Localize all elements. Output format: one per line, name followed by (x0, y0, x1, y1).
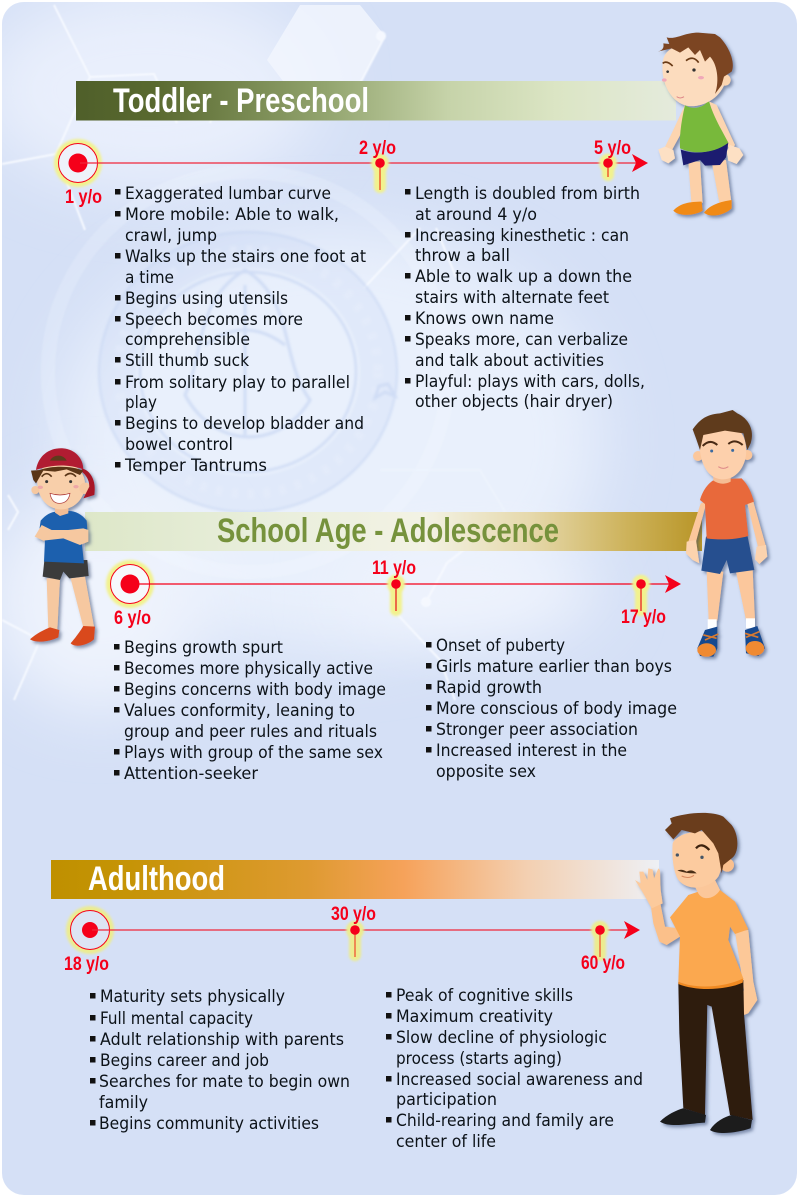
list: adulthood left column: Maturity sets physically (100, 987, 285, 1006)
timeline: adulthood: 18 y/o (64, 954, 109, 975)
list: toddler right column: at around 4 y/o (415, 205, 537, 224)
list: adulthood right column (386, 986, 643, 1151)
list: adulthood right column: Child-rearing and family are (396, 1111, 614, 1130)
timeline: toddler (54, 138, 648, 208)
character: boy with red cap (30, 448, 95, 646)
list: toddler left column: Temper Tantrums (124, 456, 267, 475)
list: adulthood left column: Adult relationship with parents (100, 1030, 344, 1049)
list: adulthood right column: process (starts aging) (396, 1049, 562, 1068)
list: school age right column: Girls mature earlier than boys (436, 657, 672, 676)
list: toddler right column: stairs with alternate feet (415, 288, 609, 307)
emblem watermark (99, 232, 397, 512)
list: toddler left column: Still thumb suck (125, 351, 249, 370)
list: toddler left column: Begins using utensils (125, 289, 288, 308)
list: adulthood left column: Begins career and job (100, 1051, 269, 1070)
list: toddler left column: play (125, 393, 157, 412)
list: school age right column: More conscious of body image (436, 699, 677, 718)
list: adulthood left column: Full mental capacity (100, 1009, 253, 1028)
list: adulthood right column: participation (396, 1090, 497, 1109)
character: toddler (658, 33, 743, 216)
list: toddler right column: Speaks more, can verbalize (415, 330, 628, 349)
list: toddler left column: From solitary play to parallel (125, 373, 350, 392)
list: school age right column (426, 636, 677, 781)
list: adulthood left column: family (99, 1093, 148, 1112)
list: toddler left column: More mobile: Able to walk, (125, 205, 339, 224)
list: school age left column: group and peer rules and rituals (124, 722, 377, 741)
list: toddler left column: Walks up the stairs one foot at (125, 247, 366, 266)
timeline: toddler: 5 y/o (594, 138, 631, 159)
list: adulthood right column: Peak of cognitive skills (396, 986, 573, 1005)
timeline: school age: 11 y/o (372, 558, 416, 579)
heading: School Age - Adolescence: School Age - Adolescence (217, 512, 559, 550)
list: toddler right column: other objects (hair dryer) (415, 392, 613, 411)
list: school age left column: Becomes more physically active (124, 659, 373, 678)
heading: Adulthood: Adulthood (88, 860, 225, 898)
list: school age left column: Attention-seeker (124, 764, 258, 783)
list: adulthood right column: Maximum creativity (396, 1007, 553, 1026)
list: toddler left column: a time (125, 268, 174, 287)
list: school age right column: Stronger peer association (436, 720, 638, 739)
list: toddler left column: crawl, jump (125, 226, 217, 245)
list: school age left column: Begins growth spurt (124, 638, 283, 657)
list: toddler left column: Begins to develop bladder and (125, 414, 364, 433)
list: toddler left column (115, 184, 366, 475)
list: toddler right column: Increasing kinesthetic : can (415, 226, 629, 245)
list: toddler right column: Able to walk up a down the (415, 267, 632, 286)
heading: Toddler - Preschool: Toddler - Preschool (113, 82, 369, 120)
list: adulthood left column (90, 987, 350, 1133)
list: school age left column: Plays with group of the same sex (124, 743, 383, 762)
list: school age right column: Increased interest in the (436, 741, 627, 760)
list: school age right column: Onset of puberty (436, 636, 565, 655)
list: toddler right column: throw a ball (415, 246, 510, 265)
list: toddler right column: Knows own name (415, 309, 554, 328)
list: toddler left column: Speech becomes more (125, 310, 303, 329)
list: adulthood left column: Searches for mate to begin own (99, 1072, 350, 1091)
list: school age right column: opposite sex (436, 762, 536, 781)
list: toddler right column: Length is doubled from birth (415, 184, 640, 203)
list: adulthood left column: Begins community activities (99, 1114, 319, 1133)
character: boy in orange shirt (686, 410, 767, 657)
list: school age left column: Values conformity, leaning to (124, 701, 355, 720)
list: school age right column: Rapid growth (436, 678, 542, 697)
list: toddler left column: bowel control (125, 435, 233, 454)
list: adulthood right column: Slow decline of physiologic (396, 1028, 607, 1047)
list: toddler left column: Exaggerated lumbar curve (125, 184, 331, 203)
list: adulthood right column: center of life (396, 1132, 496, 1151)
list: school age left column: Begins concerns with body image (124, 680, 386, 699)
list: toddler left column: comprehensible (125, 330, 250, 349)
heading band: School Age - Adolescence (85, 512, 702, 551)
heading band: Adulthood (51, 860, 659, 899)
list: adulthood right column: Increased social awareness and (396, 1070, 643, 1089)
timeline: adulthood: 60 y/o (581, 953, 625, 974)
timeline: adulthood (64, 904, 640, 975)
timeline: toddler: 2 y/o (359, 138, 396, 159)
list: school age left column (114, 638, 386, 783)
list: toddler right column: Playful: plays with cars, dolls, (415, 372, 645, 391)
character: adult man waving (635, 813, 757, 1133)
timeline: school age: 17 y/o (621, 607, 666, 628)
timeline: toddler: 1 y/o (65, 187, 102, 208)
timeline: school age: 6 y/o (114, 608, 151, 629)
list: toddler right column: and talk about activities (415, 351, 604, 370)
heading band: Toddler - Preschool (76, 81, 676, 120)
timeline: school age (106, 558, 681, 629)
list: toddler right column (405, 184, 645, 411)
timeline: adulthood: 30 y/o (331, 904, 376, 925)
